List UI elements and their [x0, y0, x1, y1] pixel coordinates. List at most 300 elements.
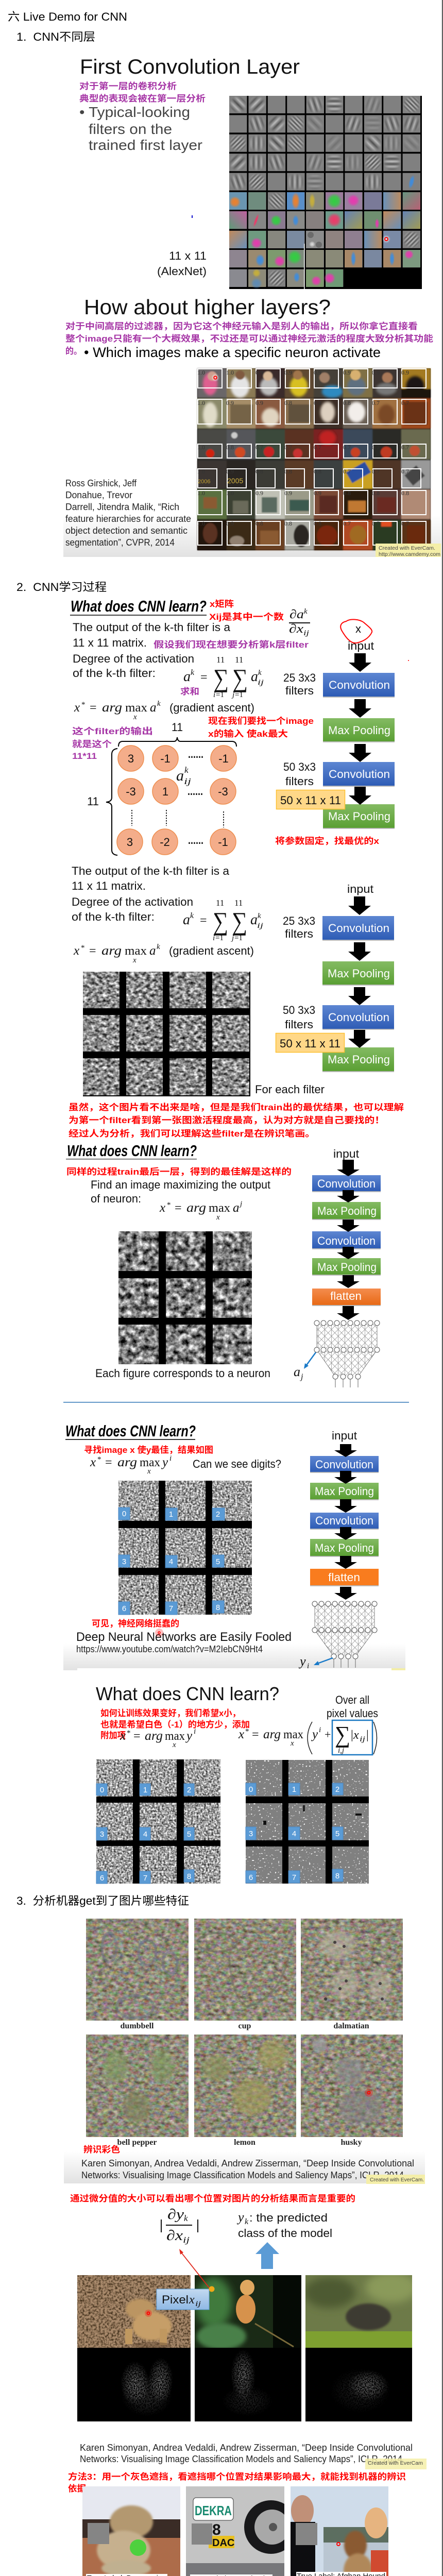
explanation text — [73, 621, 231, 680]
citation: Ross Girshick, Jeff — [65, 478, 137, 488]
red annotation — [208, 716, 314, 739]
years in sign photos: 2005 — [227, 477, 243, 485]
activation scores: 0.7 — [401, 468, 409, 475]
formula: left: max — [165, 1730, 185, 1743]
formula: activation sum: 11 — [216, 898, 224, 908]
image grid: noise digits: 4 — [143, 1830, 147, 1839]
red annotation — [209, 599, 284, 622]
purple annotation: 就是这个 — [72, 739, 112, 749]
flatten box — [310, 1569, 379, 1586]
slide: what does CNN learn - single neuron — [66, 1142, 381, 1387]
formula: gradient ascent: arg — [101, 944, 122, 958]
image grid: sparse digits: 6 — [249, 1873, 253, 1882]
filter count labels: filters — [285, 684, 314, 697]
occluding gray squares — [88, 2523, 317, 2545]
formula: max — [140, 1456, 160, 1469]
red annotation: 经过人为分析，我们可以理解这些filter是在辨识笔画。 — [69, 1128, 315, 1139]
input with hand-drawn circle: input — [348, 639, 374, 652]
formula: partial derivative: ij — [303, 629, 309, 637]
explanation text: The output of the k-th filter is a — [73, 621, 231, 634]
purple annotation: 对于第一层的卷积分析 — [79, 81, 177, 91]
formula: right with L1 term: * — [245, 1727, 249, 1736]
max pooling box: Max Pooling — [315, 1541, 374, 1554]
purple annotation: 典型的表现会被在第一层分析 — [79, 93, 206, 104]
activation scores: 1.0 — [197, 444, 205, 451]
formula: right with L1 term: ∑ — [335, 1721, 350, 1748]
max pooling box: Max Pooling — [328, 967, 390, 980]
predicted class text: class of the model — [238, 2227, 332, 2240]
formula: partial derivative: k — [304, 607, 308, 616]
red annotation: 为第一个filter看到第一张图激活程度最高，认为对方就是自己要找的！ — [69, 1115, 385, 1125]
slide: what does CNN learn - single filter — [70, 597, 409, 855]
max pooling box: Max Pooling — [328, 724, 390, 737]
image: cup: cup — [238, 2022, 251, 2030]
flatten box — [312, 1289, 381, 1306]
bullet text: trained first layer — [89, 137, 202, 153]
activation scores: 0.9 — [284, 489, 292, 497]
formula: right with L1 term — [238, 1720, 377, 1755]
section heading 3: 3. 分析机器get到了图片哪些特征 — [16, 1894, 189, 1907]
filter count labels: filters — [285, 927, 313, 940]
output size box: 50 x 11 x 11 — [280, 794, 341, 807]
formula: activation sum: a — [251, 669, 258, 685]
formula — [159, 1200, 242, 1222]
filter count labels — [283, 671, 316, 788]
formula — [90, 1454, 172, 1476]
red annotation: 寻找image x 使y最佳，结果如图 — [84, 1445, 213, 1455]
formula: * — [97, 1455, 101, 1464]
formula: activation sum: ij — [258, 679, 264, 687]
input label: input — [332, 1429, 357, 1442]
citation: Donahue, Trevor — [65, 490, 132, 500]
network stack 2 — [276, 883, 394, 1072]
purple annotation — [79, 81, 206, 104]
saliency map: buffalo — [305, 2348, 412, 2421]
red annotation: x矩阵 — [210, 599, 234, 609]
slide gradient background — [63, 515, 441, 557]
formula: = — [105, 1456, 112, 1469]
purple annotation: 假设我们现在想要分析第k层filter — [154, 639, 309, 650]
activation scores: 0.9 — [314, 489, 321, 497]
input label: input — [347, 883, 373, 895]
citation: Darrell, Jitendra Malik, “Rich — [65, 502, 179, 512]
photo: buffalo — [304, 2272, 417, 2348]
network stack 3 — [294, 1147, 381, 1387]
activation scores: 0.7 — [401, 399, 409, 406]
image: cup — [194, 1919, 296, 2030]
convolution box: Convolution — [329, 679, 390, 691]
formula: gradient ascent: * — [81, 944, 84, 952]
formula: activation sum: ∑ — [213, 664, 229, 692]
image grid: top activating image regions — [197, 368, 431, 550]
network stack 1 — [276, 619, 395, 829]
image grid: optimal neuron inputs — [118, 1231, 252, 1364]
image grid: noise digits: 4 — [169, 1557, 173, 1566]
convolution box — [323, 762, 395, 787]
filter count labels: 25 3x3 — [283, 914, 315, 927]
filter count labels: filters — [285, 1018, 313, 1031]
convolution box — [312, 1231, 381, 1249]
cursor highlight — [337, 2543, 340, 2546]
formula: activation sum — [183, 655, 264, 699]
purple annotation: sum: 求和 — [180, 687, 199, 697]
red annotation — [69, 1102, 404, 1139]
input label: input — [333, 1147, 359, 1160]
explanation text: 11 x 11 matrix. — [73, 636, 147, 649]
formula: derivative magnitude: k — [184, 2213, 188, 2223]
activation scores: 0.7 — [401, 520, 409, 527]
activation scores: 0.8 — [284, 520, 292, 527]
convolution box: Convolution — [315, 1514, 373, 1527]
formula: gradient ascent: x — [133, 713, 137, 721]
photo: lion — [77, 2275, 191, 2348]
years in sign photos — [198, 477, 243, 485]
image grid: noise digits: 7 — [143, 1874, 147, 1883]
activation scores: 0.8 — [314, 520, 321, 527]
formula: gradient ascent: max — [125, 701, 147, 715]
activation scores: 0.8 — [372, 489, 380, 497]
cursor highlight — [365, 2089, 373, 2097]
formula: left: arg — [145, 1729, 163, 1743]
formula: partial derivative: ∂x — [289, 622, 303, 636]
formula: = — [175, 1201, 182, 1215]
activation scores: 0.7 — [343, 444, 351, 451]
image grid: noise digits — [96, 1759, 220, 1884]
formula: activation sum: i — [213, 934, 215, 942]
image grid: noise digits: 6 — [122, 1604, 126, 1613]
formula: activation sum: k — [190, 911, 194, 920]
digit labels — [96, 1784, 194, 1884]
formula: gradient ascent: = — [89, 944, 96, 958]
activation scores: 0.7 — [372, 520, 380, 527]
image grid: noise digits: 1 — [169, 1510, 173, 1519]
activation scores: 0.8 — [343, 489, 351, 497]
formula: activation sum: j — [231, 691, 234, 699]
convolution box: Convolution — [317, 1177, 376, 1190]
purple annotation — [65, 321, 433, 356]
citation — [80, 2443, 413, 2464]
explanation text: Degree of the activation — [73, 652, 194, 665]
formula: activation sum: =1 — [235, 691, 243, 699]
watermark box: Created with EverCam. — [379, 546, 435, 551]
flatten box: flatten — [328, 1571, 360, 1584]
purple annotation — [72, 726, 153, 761]
true label captions — [86, 2572, 386, 2576]
convolution box — [310, 1456, 379, 1473]
predicted class text — [236, 2210, 332, 2240]
citation — [81, 2158, 414, 2180]
purple annotation: 对于中间高层的过滤器，因为它这个神经元输入是别人的输出，所以你拿它直接看 — [65, 321, 418, 331]
max pooling box — [323, 718, 395, 742]
slide heading: How about higher layers? — [84, 295, 331, 319]
formula: gradient ascent: x — [74, 701, 80, 715]
convolution box — [310, 1513, 379, 1530]
formula: right with L1 term: i — [319, 1726, 321, 1734]
matrix diagram: ...... — [188, 834, 203, 846]
image grid: sparse digits: 7 — [292, 1873, 296, 1882]
image grid: optimal filter inputs — [83, 972, 250, 1096]
formula: right with L1 term: i,j — [338, 1747, 344, 1755]
citation: Networks: Visualising Image Classification Models and Saliency Maps”, ICLR, 2014 — [80, 2454, 402, 2464]
formula: activation sum: j — [231, 934, 234, 942]
image grid: noise digits: 5 — [187, 1830, 191, 1839]
matrix diagram: 1 — [162, 785, 168, 798]
formula: activation sum: = — [200, 671, 208, 684]
flatten box: flatten — [330, 1290, 362, 1302]
red annotation: 辨识彩色 — [83, 2144, 120, 2155]
formula: right with L1 term: = — [252, 1728, 259, 1741]
formula: y — [161, 1455, 168, 1469]
activation scores: 0.9 — [343, 369, 351, 376]
arrows — [349, 653, 371, 805]
formula: activation sum: = — [200, 914, 207, 927]
convolution box: Convolution — [317, 1234, 376, 1247]
formula: gradient ascent: * — [81, 701, 86, 709]
formula: activation sum: ∑ — [232, 907, 247, 936]
activation scores: 0.7 — [343, 520, 351, 527]
formula: left: = — [133, 1730, 141, 1743]
white selection boxes — [198, 369, 426, 545]
arrow: up to prediction — [255, 2242, 279, 2269]
formula: right with L1 term: ij — [360, 1735, 365, 1743]
matrix diagram: ...... — [188, 785, 203, 798]
formula: activation sum: =1 — [216, 691, 224, 699]
citation: Networks: Visualising Image Classification Models and Saliency Maps”, ICLR, 2014 — [81, 2170, 404, 2180]
formula: gradient ascent — [74, 700, 254, 721]
bullet text: filters on the — [89, 121, 172, 137]
watermark box — [376, 544, 441, 557]
image grid: noise digits: 5 — [216, 1557, 220, 1566]
filter count labels: 50 3x3 — [283, 1004, 315, 1016]
purple annotation: 这个filter的输出 — [72, 726, 153, 736]
filter size label: 11 x 11 — [169, 249, 207, 262]
image grid: sparse digits: 1 — [292, 1785, 296, 1794]
activation scores: 0.7 — [343, 468, 351, 475]
formula: activation sum: a — [250, 912, 258, 928]
red annotation: 附加项 — [100, 1731, 126, 1740]
activation scores: 0.8 — [255, 520, 263, 527]
slide heading: What does CNN learn? — [96, 1683, 279, 1704]
matrix diagram: -3 — [126, 785, 136, 798]
image grid: sparse digits: 3 — [249, 1829, 253, 1838]
activation scores: 0.9 — [255, 489, 263, 497]
question text: Can we see digits? — [193, 1458, 281, 1470]
formula: right with L1 term: x — [238, 1727, 244, 1741]
image grid: noise digits: 0 — [122, 1510, 126, 1518]
watermark box — [365, 2459, 427, 2469]
convolution box — [312, 1175, 381, 1192]
activation scores: 0.9 — [255, 399, 263, 406]
image grid: sparse digits: 2 — [335, 1785, 339, 1794]
max pooling box — [310, 1539, 379, 1557]
red annotation: 现在我们要找一个image — [208, 716, 314, 726]
max pooling box — [310, 1483, 379, 1500]
explanation text: of the k-th filter: — [73, 667, 156, 680]
network stack 4 — [298, 1429, 379, 1670]
filter count labels: 25 3x3 — [283, 671, 316, 684]
years in sign photos: 2006 — [198, 479, 210, 485]
image: lemon: lemon — [234, 2138, 255, 2147]
output label: i — [307, 1662, 309, 1670]
activation scores: 1.0 — [197, 520, 205, 527]
citation: Karen Simonyan, Andrea Vedaldi, Andrew Zisserman, “Deep Inside Convolutional — [81, 2158, 414, 2168]
photo: car wheel: DEKRA — [195, 2503, 232, 2518]
watermark box — [366, 2175, 425, 2184]
formula: gradient ascent: (gradient ascent) — [169, 944, 254, 957]
formula: activation sum: ∑ — [232, 664, 248, 692]
activation scores: 0.8 — [343, 399, 351, 406]
slide heading: First Convolution Layer — [80, 56, 300, 78]
slide: how about higher layers — [63, 295, 441, 557]
activation scores — [197, 369, 409, 527]
formula: activation sum: ∑ — [213, 907, 228, 936]
formula: x — [159, 1201, 165, 1215]
explanation text: of neuron: — [91, 1192, 141, 1205]
matrix diagram: ij — [184, 776, 191, 786]
image: lemon — [194, 2035, 296, 2147]
formula: derivative magnitude: ij — [183, 2235, 190, 2245]
formula: right with L1 term: arg — [263, 1727, 281, 1741]
matrix diagram: -1 — [218, 836, 228, 849]
max pooling box: Max Pooling — [328, 810, 390, 823]
image grid: sparse digits: 4 — [292, 1829, 296, 1838]
image grid: noise digits: 8 — [187, 1872, 191, 1881]
watermark box: Created with EverCam. — [370, 2177, 424, 2183]
saliency map: monkey — [195, 2348, 301, 2421]
formula: * — [167, 1201, 171, 1209]
activation scores: 0.9 — [401, 369, 409, 376]
max pooling box: Max Pooling — [317, 1205, 377, 1217]
filter count labels — [283, 914, 315, 1031]
formula: j — [239, 1200, 242, 1208]
formula: activation sum: a — [183, 669, 191, 685]
citation — [65, 478, 191, 548]
purple annotation: 整个image只能有一个大概效果，不过还是可以通过神经元激活的程度大致分析其功能 — [65, 333, 433, 344]
convolution box — [322, 1005, 394, 1030]
image grid: sparse digits: 0 — [249, 1785, 253, 1794]
formula: activation sum: i — [213, 691, 215, 699]
digit labels — [246, 1783, 343, 1883]
output size box — [276, 790, 345, 809]
activation scores: 0.8 — [284, 468, 292, 475]
matrix diagram — [87, 721, 236, 855]
formula: gradient ascent: x — [132, 956, 137, 964]
cursor highlight — [145, 2310, 152, 2317]
red annotation: Xij是其中一个数 — [209, 612, 284, 622]
formula: partial derivative: ∂a — [289, 608, 304, 621]
red annotation: 虽然，这个图片看不出来是啥，但是是我们train出的最优结果，也可以理解 — [69, 1102, 404, 1112]
activation scores: 0.9 — [226, 468, 234, 475]
matrix diagram: ...... — [188, 748, 203, 760]
activation scores: 1.0 — [197, 369, 205, 376]
slide heading: What does CNN learn? — [65, 1422, 196, 1440]
formula: right with L1 term: | — [351, 1728, 353, 1742]
formula: gradient ascent — [73, 943, 254, 964]
photo: pomeranian — [82, 2486, 180, 2576]
arrow to neuron — [304, 1352, 316, 1369]
image grid: noise digits: 2 — [187, 1786, 191, 1794]
red annotation: 同样的过程train最后一层，得到的最佳解是这样的 — [66, 1166, 292, 1177]
image: dalmatian — [301, 1919, 403, 2030]
bullet text — [79, 104, 202, 153]
bullet text: • Typical-looking — [79, 104, 190, 120]
photo: car wheel: 8 — [212, 2521, 221, 2538]
formula: max — [209, 1201, 230, 1215]
formula: gradient ascent: arg — [102, 701, 122, 715]
pixel callout — [157, 2286, 214, 2310]
slide: filter visualisation — [69, 865, 404, 1139]
neuron label: j — [300, 1372, 303, 1381]
formula: x — [216, 1213, 220, 1222]
image grid: noise digits: 8 — [216, 1603, 220, 1612]
image: dalmatian: dalmatian — [333, 2022, 369, 2030]
formula: gradient ascent: = — [90, 701, 97, 715]
max pooling box — [322, 1047, 394, 1072]
formula: gradient ascent: a — [150, 701, 157, 715]
image: husky: husky — [341, 2138, 362, 2147]
formula: activation sum: a — [183, 912, 190, 928]
slide gradient background — [63, 1643, 405, 1670]
matrix diagram: k — [184, 765, 189, 775]
formula: right with L1 term: x — [353, 1728, 359, 1742]
image grid: noise digits — [118, 1481, 252, 1615]
image grid: noise digits: 0 — [100, 1786, 104, 1794]
formula: arg — [186, 1201, 206, 1215]
output label: y — [298, 1654, 306, 1669]
activation scores: 0.8 — [401, 489, 409, 497]
explanation text: of the k-th filter: — [72, 910, 155, 923]
formula: left: i — [194, 1727, 196, 1736]
convolution box — [323, 673, 395, 698]
formula: left: x — [172, 1741, 176, 1749]
formula: x — [90, 1455, 96, 1469]
activation scores: 0.9 — [314, 369, 321, 376]
formula: right with L1 term: + — [325, 1728, 331, 1741]
image: bell pepper: bell pepper — [117, 2138, 157, 2147]
activation scores: 0.7 — [372, 444, 380, 451]
formula: left: y — [185, 1729, 193, 1743]
matrix diagram: 3 — [127, 836, 133, 849]
max pooling box — [312, 1202, 381, 1220]
red annotation: 可见，神经网络挺蠢的 — [92, 1618, 179, 1629]
slide: regularised digit images — [96, 1683, 378, 1884]
formula: right with L1 term: x — [290, 1739, 294, 1748]
formula: partial derivative — [289, 607, 310, 637]
formula: gradient ascent: a — [149, 944, 156, 958]
image grid: noise digits: 7 — [169, 1604, 173, 1613]
red annotation: 通过微分值的大小可以看出哪个位置对图片的分析结果而言是重要的 — [70, 2193, 355, 2204]
image grid: noise digits: 6 — [100, 1874, 104, 1883]
purple annotation: 11*11 — [72, 751, 97, 761]
red annotation — [68, 2471, 406, 2494]
neuron label — [294, 1364, 303, 1381]
formula: right with L1 term: y — [311, 1727, 318, 1741]
page title: 六 Live Demo for CNN — [8, 10, 127, 23]
formula: i — [169, 1454, 172, 1463]
slide: what does CNN learn - digits — [63, 1422, 405, 1670]
explanation text: Degree of the activation — [72, 895, 193, 908]
max pooling box: Max Pooling — [317, 1261, 377, 1274]
explanation text: Find an image maximizing the output — [91, 1178, 270, 1191]
formula: activation sum: =1 — [234, 934, 243, 942]
fully connected network — [312, 1601, 377, 1668]
activation scores: 0.7 — [372, 399, 380, 406]
slide: occlusion experiment — [63, 2471, 425, 2576]
reference url: https://www.youtube.com/watch?v=M2IebCN9Ht4 — [76, 1644, 263, 1654]
slide: saliency maps — [70, 2193, 427, 2469]
explanation text: The output of the k-th filter is a — [72, 865, 230, 877]
photo: monkey — [195, 2275, 301, 2350]
